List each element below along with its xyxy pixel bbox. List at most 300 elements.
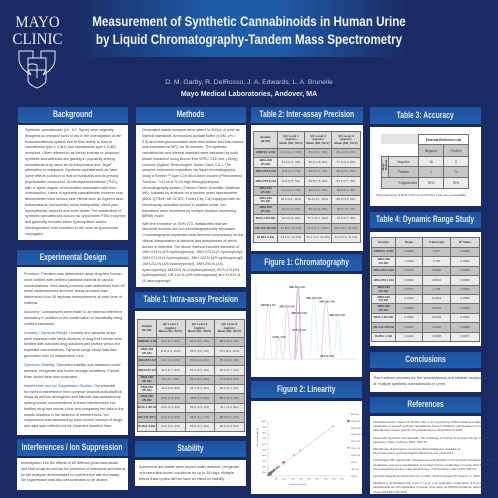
table: dynamic range: JWH-122 (377, 285, 390, 289)
table: dynamic range: 0.5614 (432, 278, 441, 282)
table: dynamic range: 0.9985 (460, 325, 470, 329)
heading: experimental design: Experimental Design (39, 252, 106, 263)
table: dynamic range: 4/5-OH (379, 289, 388, 293)
heading: experimental design (17, 250, 128, 265)
table: intra-assay precision: 23.0 (1.3, 6%) (161, 405, 180, 409)
chart: linearity scatter: 500 (307, 478, 312, 480)
table: inter-assay precision: QC Level 3 (338, 134, 354, 138)
text: experimental design body: Specimen Stability: Specimen stability was assessed under (24, 363, 121, 367)
text: experimental design body: certified standards. (24, 322, 55, 326)
table: intra-assay precision: 56.8 (3.3, 5%) (190, 424, 209, 428)
table: intra-assay precision: (ng/mL) (165, 326, 176, 330)
panel body: table 1 (135, 311, 246, 436)
panel: table 3 accuracy (370, 107, 481, 206)
table: dynamic range: 0.9433 (404, 296, 414, 300)
table: intra-assay precision: Mean (SD, %CV) (218, 329, 241, 333)
table: dynamic range: 1.0190 (404, 259, 414, 263)
text: background body: recreational drug users as an inexpensive and "legal" (25, 162, 112, 166)
heading: table 3 (370, 107, 481, 124)
text: references list: http://www.justice.gov/dea/druginfo/spice/spice.pdf. Cited 2014. (373, 451, 454, 455)
text: experimental design body: fortified drug-free human urine and comparing the data to the (24, 407, 124, 411)
text: background body: psychoactive compound, cil-tetrahydrocannabinol (THC), (25, 180, 118, 184)
text: experimental design body: serial measurements and inter-assay precision was (24, 289, 108, 293)
table: intra-assay precision: 82.5 (3.9, 5%) (220, 424, 239, 428)
table: dynamic range: UR-144 4/5-OH (373, 325, 394, 329)
table: dynamic range: AM2201 4-OH (374, 249, 393, 253)
text: experimental design body: determined from 30 replicate measurements of each level of (24, 295, 122, 299)
text: experimental design body: results obtained in the absence of interferences. Ion (24, 412, 109, 416)
heading: background (18, 107, 128, 123)
text: background body: synthetic cannabinoids are gaining in popularity among (25, 157, 115, 161)
chart: chromatogram: JWH-073 4-OH (279, 306, 295, 308)
table: intra-assay precision: 54.5 (2.3, 4%) (190, 339, 209, 343)
table: intra-assay precision: JWH-018 (140, 347, 153, 351)
footnote: *External testing of RCS-4 4/5-OH and XLR11 4-OH was not available. (376, 193, 466, 197)
panel: methods (136, 107, 246, 287)
heading: stability (135, 441, 246, 457)
table: inter-assay precision: QC Level 1 (283, 134, 299, 138)
table: intra-assay precision: 48.8 (7.3, 5%) (190, 396, 209, 400)
text: experimental design body: Precision: Precision was determined using drug-free human (24, 272, 122, 276)
table: inter-assay precision: 89.4 (3.1, 6%) (337, 169, 355, 173)
table: accuracy contingency: 1 (430, 170, 432, 174)
table: dynamic range: 0.5030 (432, 268, 441, 272)
table: inter-assay precision: 23.0 (1.5, 6%) (282, 207, 300, 211)
table: accuracy contingency (381, 134, 469, 189)
text: methods body: (6500 QTRAP, AB SCIEX, Foster City, CA) equipped with an (142, 197, 240, 201)
table: intra-assay precision: 76.7 (3.3, 5%) (220, 405, 239, 409)
text: conclusions body: This method provides for the simultaneous and reliable analysis (373, 375, 483, 380)
table: dynamic range: 0.9990 (460, 287, 470, 291)
text: methods body: using a Kinetex™ 5µm C18 50x4.6mm column (Phenomenex, (142, 174, 243, 178)
table: dynamic range: Slope (405, 240, 413, 244)
text: background body: hallucinations, tachycardia, sinus bradycardia, chest pain, (25, 203, 119, 207)
text: conclusions body: of multiple synthetic cannabinoids in urine. (373, 381, 446, 386)
table: intra-assay precision: 11.6 (0.9, 8%) (161, 386, 180, 390)
table: inter-assay precision: 62.0 (3.7, 7.6%) (307, 226, 329, 230)
table: inter-assay precision: XLR11 4-OH (257, 235, 274, 239)
chart: linearity scatter (256, 413, 362, 486)
table: inter-assay precision: 11.6 (1.1, 7.9%) (280, 150, 302, 154)
heading: references: References (407, 399, 444, 410)
heading: methods (136, 107, 246, 123)
text: experimental design body: thaw cycles were also evaluated. (24, 374, 78, 378)
logo wordmark (12, 14, 63, 48)
table: intra-assay precision (137, 319, 245, 432)
text: experimental design body: were assessed with serial dilutions of drug-free human urine (24, 336, 122, 340)
text: references list: Wohlfarth A, Scheidweiler KB, Chen X, Liu H, et al. Qualitative confirmation of 9 synthetic (373, 481, 487, 485)
text: background body: demonstrate more serious side effects such as hypertension, (25, 197, 124, 201)
heading: figure 1: Figure 1: Chromatography (264, 257, 349, 268)
text: methods body (136, 125, 246, 287)
icon: three shields (18, 50, 56, 88)
text: methods body: 5.0) and beta-glucuronidase were then added and this mixture (142, 140, 243, 144)
table: dynamic range: 4/5-OH (379, 298, 388, 302)
heading: interferences (17, 439, 128, 456)
chart: chromatogram: AM2201 4-OH (261, 304, 276, 307)
chart: linearity scatter: JWH-018 (351, 421, 361, 423)
chart: linearity scatter: 100 (274, 478, 279, 480)
heading: methods: Methods (177, 109, 205, 120)
chart: linearity scatter: JWH-210 (351, 448, 361, 450)
table: inter-assay precision: 56.2 (1.8, 8%) (309, 160, 327, 164)
table: intra-assay precision: 53.6 (2.3, 4%) (190, 358, 209, 362)
panel body: figure 1 (251, 274, 362, 377)
table: inter-assay precision: 56.4 (4.7, 8%) (309, 188, 327, 192)
table: dynamic range: 0.9998 (460, 249, 470, 253)
text: methods body: hydroxypentyl), UR-144 N-(4/5-hydroxypentyl) and XLR11 N- (142, 273, 241, 277)
text: methods body: clinical interpretation is identical and independent of which (142, 239, 237, 243)
table: inter-assay precision: 4/5-OH (261, 199, 270, 203)
table: intra-assay precision: JWH-122 (140, 375, 153, 379)
table: inter-assay precision: JWH-018 (259, 158, 272, 162)
table: inter-assay precision: 79.6 (6.1, 10.1%) (334, 226, 358, 230)
chart: linearity scatter: 500 (262, 450, 267, 452)
table: inter-assay precision: 78.6 (6.1, 8%) (337, 188, 355, 192)
table: dynamic range: R² Value (459, 240, 471, 244)
text: methods body: JWH-073 N-(4-hydroxybutyl), JWH-122 N-(4/5-hydroxypentyl) (142, 256, 243, 260)
table: inter-assay precision: 57.7 (5.4, 10%) (308, 216, 328, 220)
text: interferences body: and illicit drugs as well as the presence of hemolysis and icterus (21, 467, 126, 471)
heading: interferences: Interferences / Ion Suppression (22, 442, 123, 453)
chart: chromatogram: UR-144 4-OH (320, 355, 334, 358)
text: methods body: internal standards. Ammonium acetate buffer (0.5M, pH = (142, 134, 236, 138)
table: dynamic range: 0.9820 (404, 306, 414, 310)
table: dynamic range: 1.736 (433, 287, 440, 291)
table: intra-assay precision: Mean (SD, %CV) (159, 329, 182, 333)
heading: conclusions (370, 352, 481, 368)
table: inter-assay precision: 67.1 (1.7, 11.3%) (307, 235, 329, 239)
panel body: table 2 (251, 125, 363, 251)
table: intra-assay precision: 84.0 (5.4, 6%) (220, 386, 239, 390)
text: background body: conjugates. (25, 232, 44, 236)
table: intra-assay precision: 87.0 (3.7, 4%) (220, 368, 239, 372)
text: references list: DEA Bureau of Emergency Control Synthetic Marijuana. Available at: (373, 447, 461, 451)
table: inter-assay precision: Mean (SD, %CV) (306, 141, 330, 145)
table: inter-assay precision: 4/5-OH (261, 209, 270, 213)
text: methods body: JWH-210 N-(4/5-hydroxypentyl), JWH-250 N-(4/5- (142, 262, 224, 266)
heading: table 1: Table 1: Intra-assay Precision (143, 294, 238, 305)
text: references list: Scheidweiler KB, Huestis MA. Simultaneous quantification of 20 synthetic cannabinoids and 21 (373, 458, 494, 462)
text: experimental design body: laboratory in addition to the confirmation of traceability using (24, 316, 122, 320)
chart: linearity scatter: 200 (262, 466, 267, 468)
table: intra-assay precision: 9.6 (0.7, 8%) (162, 377, 179, 381)
chart: linearity scatter: JWH-073 4 (351, 434, 362, 436)
table: intra-assay precision: 56.8 (4.1, 7%) (190, 415, 209, 419)
logo wordmark: CLINIC (12, 31, 63, 48)
table: intra-assay precision: JWH-250 (140, 394, 153, 398)
table: intra-assay precision: (ng/mL) (194, 326, 205, 330)
chart: linearity scatter: 200 (282, 478, 287, 480)
heading: table 4 (370, 212, 481, 228)
chart: linearity scatter: 900 (340, 478, 345, 480)
text: references list: Synthetic Drug Abuse Prevention Act of 2012, 112th Congress 2D Session, S. 3190. (373, 474, 480, 478)
text: experimental design body: urine fortified with certified standard material at various (24, 278, 113, 282)
text: experimental design body: ambient, refrigerate and frozen storage conditions. Freeze- (24, 369, 120, 373)
table: inter-assay precision: 11.6 (1.5, 5%) (282, 179, 300, 183)
table: accuracy contingency: % Agreement (398, 181, 417, 185)
table: intra-assay precision: JWH-210 (140, 385, 153, 389)
table: inter-assay precision: 77.4 (6.4, 8%) (337, 160, 355, 164)
table: accuracy contingency: 99% (453, 181, 459, 185)
table: dynamic range: 0.9996 (460, 278, 470, 282)
table: inter-assay precision: Analyte (260, 135, 271, 139)
chart: chromatogram: RCS-4 4-OH (292, 329, 306, 332)
table: dynamic range: 0.9989 (460, 296, 470, 300)
logo wordmark: MAYO (15, 14, 60, 31)
heading: table 2 (251, 107, 363, 123)
table: inter-assay precision: 54.0 (3.7, 6%) (309, 150, 327, 154)
table: dynamic range: 0.977 (433, 249, 440, 253)
table: intra-assay precision: 21.8 (1.3, 6%) (161, 415, 180, 419)
text: experimental design body: fortified with standard drug solutions and plotted versus the (24, 342, 120, 346)
chart: chromatogram: XLR11 4-OH (272, 336, 286, 339)
table: dynamic range: JWH-018 (377, 257, 390, 261)
text: experimental design body: Accuracy: Comparisons were made to an external reference (24, 310, 122, 314)
text: references list: Chem 2013;85:3730-3738. (373, 490, 407, 494)
text: stability body (135, 460, 246, 486)
table: inter-assay precision: 13.0 (1, 11.2%) (281, 235, 301, 239)
panel: figure 1 chromatography (251, 254, 362, 377)
panel: experimental design (17, 250, 128, 435)
table: dynamic range: JWH-073 4-OH (373, 278, 394, 282)
table: intra-assay precision: 4/5-OH (142, 388, 152, 392)
table: inter-assay precision: 41.0 (4.6, 11.1%) (335, 235, 357, 239)
text: methods body: was incubated at 60ºC for 30 minutes. The synthetic (142, 145, 227, 149)
panel: background (18, 107, 128, 240)
table: inter-assay precision (253, 131, 361, 243)
title: by Liquid Chromatography-Tandem Mass Spectrometry (96, 32, 402, 47)
table: intra-assay precision: 56.6 (4.3, 8%) (190, 377, 209, 381)
table: intra-assay precision: (N=20) (142, 328, 151, 332)
table: dynamic range: 0.9973 (460, 334, 470, 338)
table: inter-assay precision: 87.1 (2.7, 6%) (337, 179, 355, 183)
panel: conclusions (370, 352, 483, 392)
table: inter-assay precision: 80.5 (5.6, 6%) (337, 197, 355, 201)
panel body: figure 2 (251, 401, 362, 494)
text: background body: receptors. Often referred to as herbal incense or potpourri, (25, 151, 120, 155)
table: intra-assay precision: 12.0 (0.3, 6%) (161, 424, 180, 428)
chart: linearity scatter: UR-144 (351, 469, 359, 471)
table: accuracy contingency: 70 (454, 170, 458, 174)
text: methods body: Torrance, CA) on a TLXII high-throughput/quad (142, 180, 219, 184)
text: references list: metabolites, and semi-quantification of 12 alkyl hydroxy metabolites in human urine by liquid (373, 463, 491, 467)
table: dynamic range: 1.0692 (432, 325, 441, 329)
text: methods body: (4-hydroxypentyl). (142, 279, 172, 283)
panel body: table 3 (370, 127, 481, 206)
table: accuracy contingency: Negative (397, 160, 410, 164)
text: background body: consumption. Users of synthetic cannabinoids however may (25, 191, 123, 195)
table: intra-assay precision: 80.5 (3.4, 6%) (220, 396, 239, 400)
panel body: table 4 (370, 232, 481, 346)
chart: chromatogram: JWH-018 4-OH (289, 286, 305, 289)
table: inter-assay precision: 55.0 (1.4, 8%) (309, 207, 327, 211)
text: interferences body: Investigation into the effects of 80 different pharmaceuticals (21, 461, 118, 465)
chart: linearity scatter: 300 (291, 478, 296, 480)
table: accuracy contingency: 16 (429, 160, 433, 164)
table: intra-assay precision: Mean (SD, %CV) (188, 329, 211, 333)
heading: references (370, 397, 481, 413)
table: accuracy contingency: Positive (450, 148, 462, 152)
table: accuracy contingency: Medical (384, 160, 388, 170)
panel: table 4 dynamic range (370, 212, 481, 346)
table: inter-assay precision: 90.2 (4.4, 5%) (337, 150, 355, 154)
table: dynamic range: 0.755 (433, 259, 440, 263)
text: experimental design body: suppression was assessed by post-column infusion of drugs (24, 418, 122, 422)
table: inter-assay precision: 21.4 (2.1, 9%) (282, 160, 300, 164)
table: dynamic range: 0.8444 (432, 306, 441, 310)
table: inter-assay precision: (ng/mL) (312, 137, 324, 141)
table: dynamic range: 0.9997 (460, 315, 470, 319)
table: intra-assay precision: 77.0 (5.8, 8%) (220, 377, 239, 381)
table: inter-assay precision: 22.0 (3.4, 8%) (282, 216, 300, 220)
heading: background: Background (53, 109, 93, 120)
chart: linearity scatter: 400 (299, 478, 304, 480)
table: inter-assay precision: 4/5-OH (261, 162, 270, 166)
title (92, 14, 406, 47)
text: methods body: electrospray ionization source in positive mode. Ion (142, 203, 226, 207)
text: background body: dehalogenation with excretion in the urine as glucuronide (25, 226, 118, 230)
table: dynamic range: 0.9950 (404, 249, 414, 253)
text: stability body: Specimens are stable when stored under ambient, refrigerate (139, 465, 239, 469)
table: intra-assay precision: 23.0 (1.4, 6%) (161, 396, 180, 400)
chart: linearity scatter: 600 (262, 444, 267, 446)
heading: conclusions: Conclusions (405, 354, 446, 365)
table: dynamic range: 4/5-OH (379, 261, 388, 265)
heading: table 3: Table 3: Accuracy (397, 110, 454, 121)
table: intra-assay precision: 52.1 (3.3, 6%) (190, 386, 209, 390)
table: inter-assay precision: JWH-250 (259, 205, 272, 209)
table: inter-assay precision: JWH-210 (259, 196, 272, 200)
text: experimental design body: Linearity / Dynamic Range: Linearity and dynamic range (24, 331, 116, 335)
chart: linearity scatter: 300 (262, 461, 267, 463)
chart: chromatogram: JWH-122 5-OH (306, 298, 322, 300)
title: Measurement of Synthetic Cannabinoids in Human Urine (92, 14, 406, 29)
table: intra-assay precision: QC Level 2 (192, 322, 207, 326)
text: background body (18, 125, 128, 240)
chart: linearity scatter: 800 (262, 432, 267, 434)
text: background body: endocannabinoid system due to their ability to bind to (25, 140, 112, 144)
table: inter-assay precision: JWH-073 3-OH (255, 169, 276, 173)
text: interferences body: Ion suppression was also demonstrated to be absent. (21, 478, 108, 482)
table: dynamic range: 0.9996 (460, 306, 470, 310)
text: stability body: or frozen/ultra-frozen conditions for up to 35 days. Multiple (139, 471, 234, 475)
table: dynamic range: Analyte (378, 240, 389, 244)
text: background body: Synthetic cannabinoids (i.e., K2, Spice) were originally (25, 128, 114, 132)
table: inter-assay precision: 55.8 (7.7, 7%) (309, 169, 327, 173)
text: methods body: hydroxypentyl), AM2201 N-(4-hydroxypentyl), RCS-4 N-(4/5- (142, 268, 241, 272)
chart: linearity scatter: 700 (262, 438, 267, 440)
chart: linearity scatter: 600 (315, 478, 320, 480)
text: methods body: columns (Agilent Technologies, Santa Clara, CA.). The (142, 162, 231, 166)
table: inter-assay precision: JWH-122 (259, 186, 272, 190)
text: background body: with a higher degree of intoxication associated with their (25, 186, 116, 190)
table: dynamic range: JWH-210 (377, 295, 390, 299)
chart: linearity scatter: 700 (324, 478, 329, 480)
table: dynamic range: JWH-250 (377, 304, 390, 308)
text: background body: alternative to marijuana. Synthetic cannabinoids do have (25, 168, 117, 172)
chart: chromatogram: JWH-073 3-OH (291, 313, 307, 315)
table: intra-assay precision: 11.5 (0.4, 4%) (161, 339, 180, 343)
table: intra-assay precision: 88.6 (3.3, 4%) (220, 339, 239, 343)
panel: interferences / ion suppression (17, 439, 128, 490)
table: inter-assay precision: Mean (SD, %CV) (279, 141, 303, 145)
chart: linearity scatter: Expected (ng/mL) (289, 483, 307, 486)
table: intra-assay precision: (ng/mL) (224, 326, 235, 330)
table: inter-assay precision: UR-144 4/5-OH (255, 226, 276, 230)
table: dynamic range: RCS-4 4/5-OH (374, 315, 393, 319)
text: experimental design body: material. (24, 301, 38, 305)
table: inter-assay precision: AM2201 4-OH (256, 150, 275, 154)
text: experimental design body: concentrations. Intra-assay precision was determined from 20 (24, 284, 125, 288)
table: intra-assay precision: 87.4 (3.4, 4%) (220, 358, 239, 362)
table: accuracy contingency: Positive (398, 170, 409, 174)
table: dynamic range (371, 237, 480, 342)
chart: chromatogram (256, 284, 357, 360)
text: references list (370, 416, 481, 494)
table: intra-assay precision: 4/5-OH (142, 379, 152, 383)
panel: references (370, 397, 494, 494)
shaded corner cell (381, 134, 418, 144)
heading: table 1 (135, 292, 246, 308)
chart: linearity scatter: AM2201 (351, 413, 360, 416)
table: inter-assay precision: QC Level 2 (310, 134, 326, 138)
table: accuracy contingency: External Reference Lab (426, 138, 461, 142)
table: inter-assay precision: 21.8 (2, 10.7%) (281, 226, 301, 230)
chart: linearity scatter: Measured (ng/mL) (256, 428, 259, 446)
table: inter-assay precision: 79.5 (6.7, 8%) (337, 216, 355, 220)
table: intra-assay precision: 11.8 (1.3, 11%) (160, 349, 181, 353)
table: dynamic range: 0.9966 (404, 315, 414, 319)
logo: Mayo Clinic (12, 14, 63, 88)
panel: figure 2 linearity (251, 381, 362, 494)
chart: linearity scatter: XLR11 (351, 476, 358, 478)
text: background body: cannabinoid type 1 (CB1) and cannabinoid type 2 (CB2) (25, 145, 116, 149)
text: methods body: With the exception of JWH-073, metabolites that are (142, 222, 227, 226)
table: intra-assay precision: 4/5-OH (142, 398, 152, 402)
table: inter-assay precision: 50.5 (5.1, 10%) (308, 197, 328, 201)
chart: chromatogram: JWH-210 5-OH (329, 315, 345, 317)
chart: linearity scatter: JWH-122 (351, 441, 361, 443)
table: intra-assay precision: 80.9 (5.1, 6%) (220, 415, 239, 419)
heading: table 2: Table 2: Inter-assay Precision (260, 109, 354, 120)
text: references list: chromatography-tandem mass spectrometry. J Chromatogr A 2014;1327:105-117. (373, 467, 478, 471)
table: dynamic range: Y-Intercept (429, 240, 444, 244)
text: methods body: isomer is detected. The above method includes detection of (142, 244, 239, 248)
chart: chromatogram: JWH-250 4-OH (319, 300, 335, 304)
text: methods body: transitions were monitored by multiple reaction monitoring (142, 208, 236, 212)
text: methods body: samples underwent separation via liquid chromatography (142, 168, 235, 172)
table: dynamic range: JWH-073 3-OH (373, 268, 394, 272)
text: references list: cannabinoids and 20 metabolites in human urine using LC-MS/MS and library search. Anal (373, 485, 489, 489)
table: inter-assay precision: 21.4 (2.1, 7%) (282, 188, 300, 192)
table: inter-assay precision: (N=30) (261, 139, 270, 143)
table: dynamic range: 0.9920 (404, 278, 414, 282)
text: experimental design body: for method interference from common pharmaceuticals/illicit (24, 390, 122, 394)
table: dynamic range: 0.9996 (460, 268, 470, 272)
table: inter-assay precision: 18.6 (2.1, 11%) (281, 197, 301, 201)
table: intra-assay precision: 56.6 (5.2, 9%) (190, 349, 209, 353)
text: stability body: freeze-thaw cycles did not have an effect on stability. (139, 476, 225, 480)
text: background body: dysrhythmias, seizures and even death. The metabolism of (25, 208, 121, 212)
table: dynamic range: 0.9991 (460, 259, 470, 263)
table: intra-assay precision: 54.0 (2.3, 4%) (190, 368, 209, 372)
table: inter-assay precision: 78.9 (7.7, 7%) (337, 207, 355, 211)
text: interferences body (17, 458, 128, 490)
table: inter-assay precision: (ng/mL) (340, 137, 352, 141)
text: references list: Chase MD. Synthetic Cannabinoids: The Challenge of Testing for Designer Drugs. Clinical (373, 436, 488, 440)
authors: D. M. Garby, R. DelRosso, J. A. Edwards, L. A. Brunelle (165, 79, 333, 86)
